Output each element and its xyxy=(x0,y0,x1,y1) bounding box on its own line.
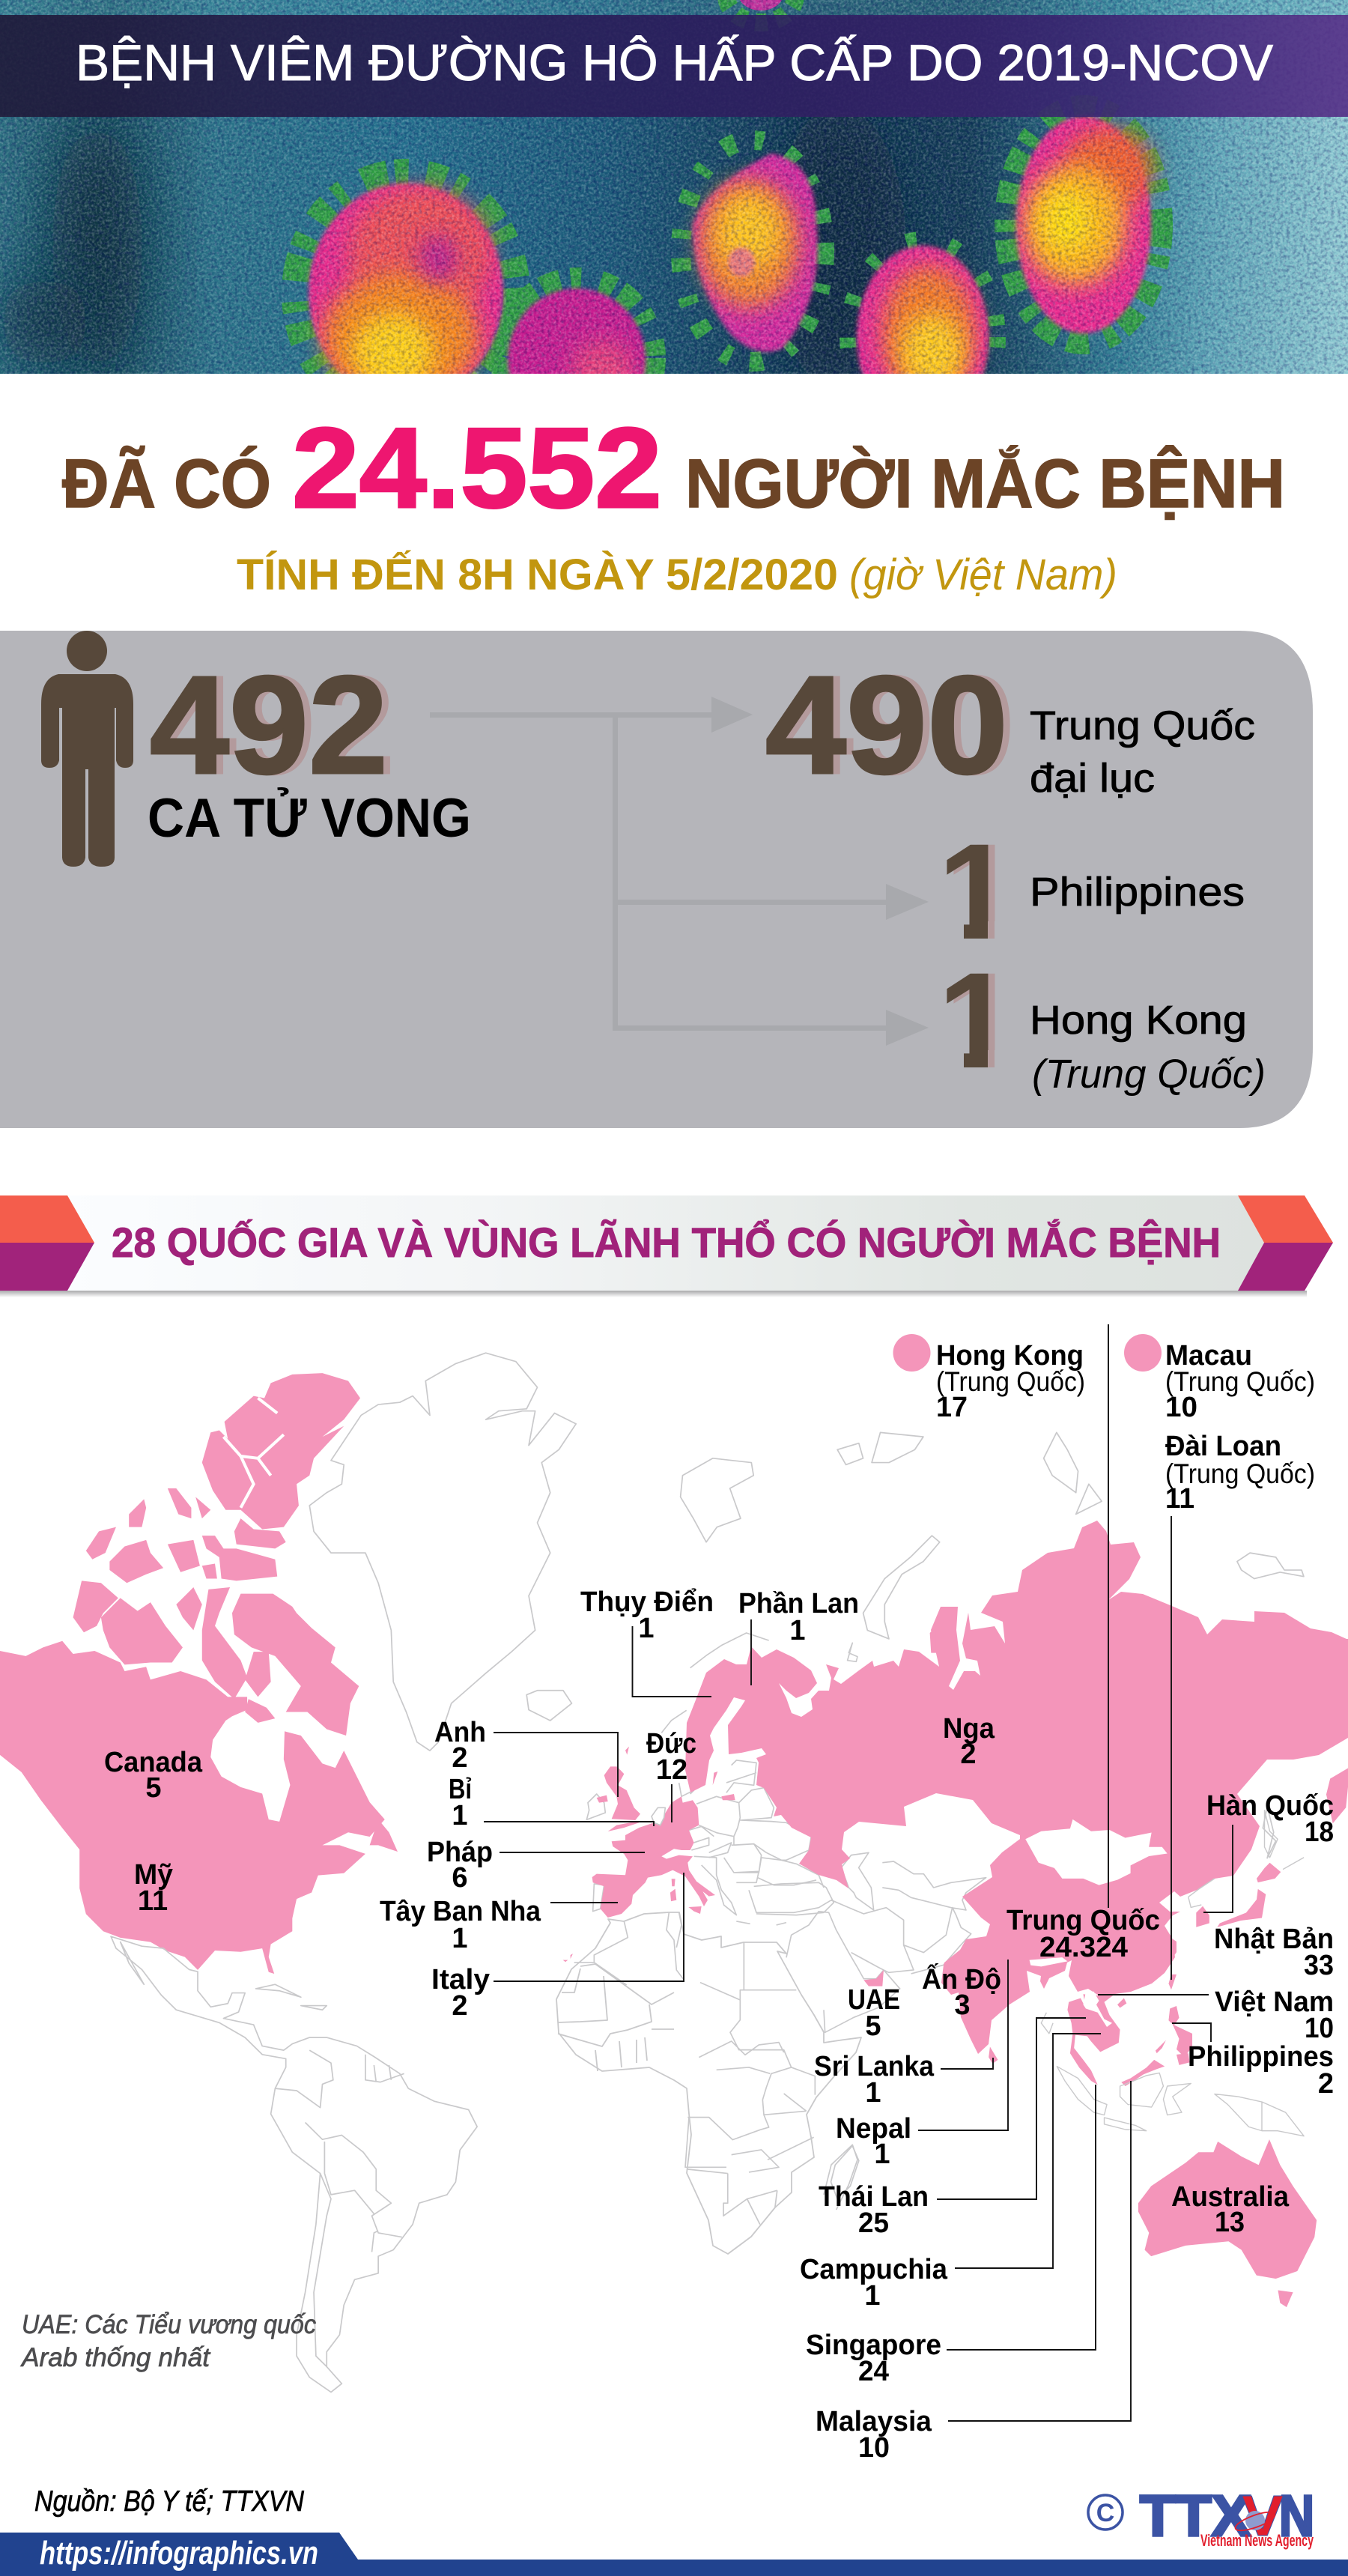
legend: Hong Kong: (Trung Quốc) xyxy=(936,1366,1085,1397)
label: deaths: CA TỬ VONG xyxy=(148,788,471,849)
label: Singapore xyxy=(806,2330,941,2387)
label: Sri Lanka: Sri Lanka xyxy=(814,2051,935,2082)
legend: Macau: Macau xyxy=(1165,1340,1252,1372)
label: Vietnam xyxy=(1215,1986,1334,2044)
arrows xyxy=(430,697,929,1046)
label: Canada xyxy=(104,1747,203,1804)
green spikes xyxy=(282,0,1173,374)
headline: total cases: ĐÃ CÓ xyxy=(62,445,271,522)
map: Asia details xyxy=(989,1769,1348,2136)
label: USA xyxy=(134,1859,173,1917)
label: Nepal xyxy=(836,2113,911,2170)
number: 1 Hong Kong: 1 xyxy=(938,944,1013,1097)
subtitle: date: TÍNH ĐẾN 8H NGÀY 5/2/2020 xyxy=(237,551,838,599)
label: Hong Kong: (Trung Quốc) xyxy=(1032,1052,1266,1097)
virus particle 1 xyxy=(309,184,503,401)
label: Cambodia xyxy=(800,2254,948,2312)
label: Sri Lanka xyxy=(814,2051,935,2109)
label: India: 3 xyxy=(954,1989,971,2021)
label: Sri Lanka: 1 xyxy=(865,2077,881,2109)
label: Russia xyxy=(943,1713,995,1770)
virus particle 2 xyxy=(505,285,650,374)
label: Thailand xyxy=(819,2181,929,2239)
logo: TTXVN xyxy=(1088,2484,1314,2550)
note: UAE abbreviation xyxy=(20,2310,316,2372)
label: Italy: Italy xyxy=(431,1964,490,1995)
label: Sweden xyxy=(580,1586,714,1644)
legend: Macau: 10 xyxy=(1165,1392,1197,1423)
label: UAE xyxy=(848,1984,900,2042)
logo: TTXVN: TTX xyxy=(1140,2484,1251,2548)
label: Russia: 2 xyxy=(960,1739,977,1770)
hero photo: coronavirus particles xyxy=(0,0,1348,374)
banner heading: 28 QUỐC GIA VÀ VÙNG LÃNH THỔ CÓ NGƯỜI MẮC BỆNH xyxy=(112,1219,1221,1266)
number: 1 Philippines: 1 xyxy=(938,815,1013,968)
icon: person xyxy=(41,631,133,867)
legend: Hong Kong: Hong Kong xyxy=(936,1340,1084,1372)
logo: TTXVN: N xyxy=(1279,2484,1314,2548)
label: Finland xyxy=(738,1588,859,1646)
section banner xyxy=(0,1195,1333,1297)
logo: TTXVN: C xyxy=(1096,2499,1114,2527)
label: Belgium: 1 xyxy=(452,1800,468,1831)
label: Belgium xyxy=(449,1774,472,1831)
headline: total cases xyxy=(62,404,1285,532)
label: Germany: 12 xyxy=(656,1754,687,1786)
label: South Korea: Hàn Quốc xyxy=(1206,1790,1334,1822)
label: Russia: Nga xyxy=(943,1713,995,1745)
number: 492 deaths: 492 xyxy=(157,648,395,803)
number: 490 mainland China: 490 xyxy=(772,648,1015,803)
title: BỆNH VIÊM ĐƯỜNG HÔ HẤP CẤP DO 2019-NCOV xyxy=(76,34,1274,91)
map: southern Africa and Oceania xyxy=(687,2139,1317,2307)
label: Thailand: 25 xyxy=(858,2207,889,2239)
leader lines xyxy=(484,1324,1233,2421)
map: UAE xyxy=(863,1970,884,1986)
label: China: 24.324 xyxy=(1039,1932,1128,1963)
label: India xyxy=(922,1963,1001,2021)
number: 1 Philippines xyxy=(947,845,995,939)
label: France: Pháp xyxy=(427,1837,493,1868)
label: UAE: UAE xyxy=(848,1984,900,2016)
label: mainland China xyxy=(1030,703,1255,801)
number: 1 Hong Kong xyxy=(947,974,995,1067)
label: Hong Kong xyxy=(1030,998,1266,1097)
number: 1 Philippines: 1 xyxy=(944,815,1020,968)
label: Philippines: Philippines xyxy=(1188,2041,1334,2073)
label: UK: Anh xyxy=(434,1717,486,1748)
number: 490 mainland China: 490 xyxy=(765,648,1008,803)
note: UAE abbreviation: UAE: Các Tiểu vương quốc xyxy=(22,2310,316,2339)
legend: Hong Kong: 17 xyxy=(936,1392,968,1423)
label: Philippines: Philippines xyxy=(1030,870,1245,915)
label: France xyxy=(427,1837,493,1894)
label: Taiwan: (Trung Quốc) xyxy=(1165,1458,1315,1489)
source: Nguồn: Bộ Y tế; TTXVN xyxy=(34,2485,305,2518)
label: Malaysia xyxy=(816,2406,932,2464)
label: Canada: 5 xyxy=(145,1772,162,1804)
label: Australia: 13 xyxy=(1215,2207,1245,2238)
map: Europe pink countries xyxy=(563,1627,936,1962)
panel: deaths xyxy=(0,631,1313,1128)
title band xyxy=(0,15,1348,117)
virus particle 3 xyxy=(693,154,818,352)
label: Italy: 2 xyxy=(452,1990,468,2022)
label: China: Trung Quốc xyxy=(1007,1905,1160,1936)
note: UAE abbreviation: Arab thống nhất xyxy=(20,2343,210,2372)
label: Finland: Phần Lan xyxy=(738,1588,859,1619)
map: Eurasia xyxy=(685,1521,1348,2054)
label: France: 6 xyxy=(452,1862,468,1894)
label: Germany xyxy=(646,1728,696,1786)
map: Africa and Asia borders xyxy=(685,1861,986,2210)
label: Australia xyxy=(1171,2181,1290,2238)
logo: TTXVN: V xyxy=(1242,2484,1284,2548)
label: Germany: Đức xyxy=(646,1728,696,1760)
label: Philippines xyxy=(1188,2041,1334,2100)
subtitle: date: (giờ Việt Nam) xyxy=(849,551,1117,599)
label: Singapore: 24 xyxy=(858,2356,889,2387)
label: Malaysia: Malaysia xyxy=(816,2406,932,2437)
label: USA: 11 xyxy=(138,1885,168,1917)
label: Hong Kong: Hong Kong xyxy=(1030,998,1247,1043)
legend: Hong Kong xyxy=(893,1334,1085,1423)
world map xyxy=(0,1353,1348,2392)
label: South Korea: 18 xyxy=(1305,1816,1334,1848)
label: Vietnam: 10 xyxy=(1305,2013,1334,2044)
label: India: Ấn Độ xyxy=(922,1963,1001,1995)
legend: Macau: (Trung Quốc) xyxy=(1165,1366,1315,1397)
label: Italy xyxy=(431,1964,490,2022)
number: 492 deaths: 492 xyxy=(150,648,388,803)
label: Japan xyxy=(1214,1924,1334,1981)
headline: total cases: 24.552 xyxy=(292,404,662,532)
map: Europe borders xyxy=(574,1633,874,1985)
label: Cambodia: 1 xyxy=(864,2280,881,2312)
map: Arctic islands xyxy=(681,1432,1304,1858)
virus particle 5 xyxy=(1016,116,1153,333)
map: Africa xyxy=(556,1912,861,2254)
label: Japan: 33 xyxy=(1304,1950,1334,1981)
label: UK: 2 xyxy=(452,1742,468,1774)
label: China xyxy=(1007,1905,1160,1963)
label: Cambodia: Campuchia xyxy=(800,2254,948,2285)
label: Malaysia: 10 xyxy=(858,2432,890,2464)
label: UK xyxy=(434,1717,486,1774)
label: Sweden: Thụy Điển xyxy=(580,1586,714,1618)
label: South Korea xyxy=(1206,1790,1334,1848)
label: Spain: 1 xyxy=(452,1923,468,1954)
label: Australia: Australia xyxy=(1171,2181,1290,2213)
label: Spain xyxy=(380,1896,541,1954)
label: Taiwan: 11 xyxy=(1165,1483,1194,1515)
label: Vietnam: Việt Nam xyxy=(1215,1986,1334,2018)
label: Philippines: 2 xyxy=(1318,2068,1334,2100)
label: Spain: Tây Ban Nha xyxy=(380,1896,541,1927)
map: North America xyxy=(0,1353,576,1974)
subtitle: date xyxy=(237,551,1117,599)
virus particle 4 xyxy=(854,242,993,374)
label: Nepal: 1 xyxy=(874,2139,890,2170)
label: Finland: 1 xyxy=(789,1615,806,1646)
label: UAE: 5 xyxy=(865,2010,881,2042)
label: Belgium: Bỉ xyxy=(449,1774,472,1805)
footer bar with URL: https://infographics.vn xyxy=(40,2535,318,2572)
label: Singapore: Singapore xyxy=(806,2330,941,2361)
map: Latin America xyxy=(111,1936,477,2392)
label: mainland China: đại lục xyxy=(1030,756,1155,801)
number: 1 Hong Kong: 1 xyxy=(944,944,1020,1097)
label: mainland China: Trung Quốc xyxy=(1030,703,1255,748)
label: Thailand: Thái Lan xyxy=(819,2181,929,2213)
headline: total cases: NGƯỜI MẮC BỆNH xyxy=(685,445,1285,522)
label: Japan: Nhật Bản xyxy=(1214,1924,1334,1955)
label: Taiwan: Đài Loan xyxy=(1165,1431,1281,1462)
label: Nepal: Nepal xyxy=(836,2113,911,2145)
legend: Macau xyxy=(1124,1334,1315,1423)
label: Sweden: 1 xyxy=(638,1613,655,1644)
label: USA: Mỹ xyxy=(134,1859,173,1891)
label: Canada: Canada xyxy=(104,1747,203,1778)
footer bar with URL xyxy=(0,2533,1348,2576)
label: Taiwan xyxy=(1165,1431,1315,1515)
